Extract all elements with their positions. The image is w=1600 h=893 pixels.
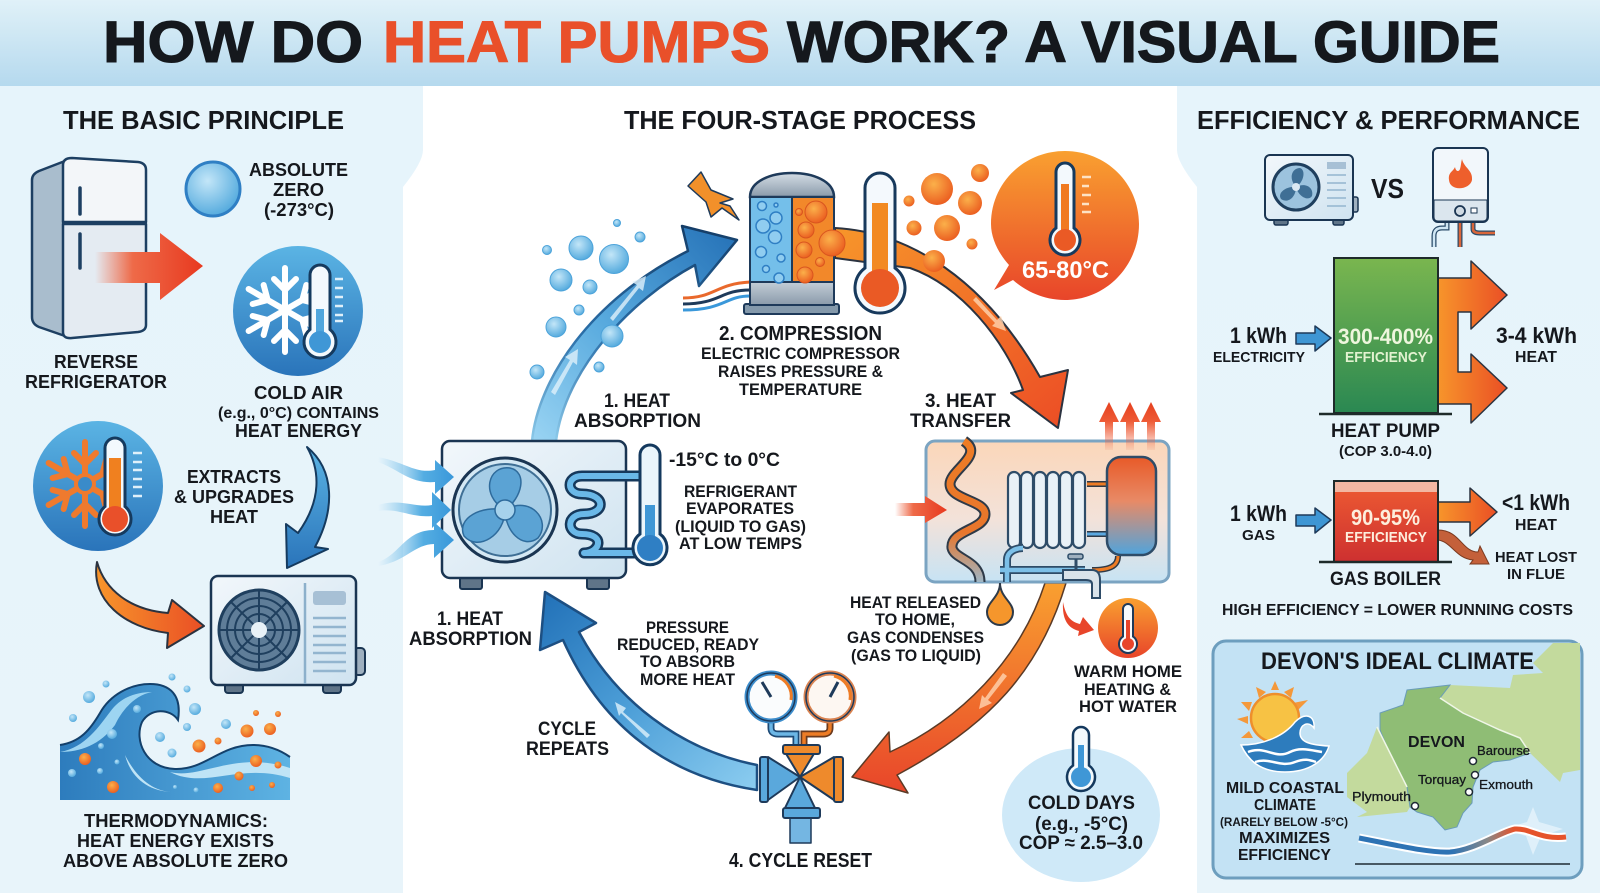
small flow arrows on arcs xyxy=(551,276,1007,738)
bar: heat pump efficiency: EFFICIENCY xyxy=(1345,349,1427,366)
icon: refrigerator xyxy=(32,158,146,338)
text: mild coastal climate: CLIMATE xyxy=(1254,797,1316,814)
text: 1 kWh gas xyxy=(1230,501,1287,544)
text: cold air contains heat energy: COLD AIR xyxy=(254,383,343,403)
text: heat released: GAS CONDENSES xyxy=(847,628,984,647)
arrows: rising heat xyxy=(1099,402,1161,450)
text: 1 kWh electricity xyxy=(1213,323,1305,366)
arrow: to warm home xyxy=(1063,602,1094,636)
text: heat released: HEAT RELEASED xyxy=(850,593,981,612)
text: 1. heat absorption upper: ABSORPTION xyxy=(574,411,701,432)
text: mild coastal climate: MILD COASTAL xyxy=(1226,780,1344,797)
icon: hot thermometer xyxy=(855,173,905,313)
callout: cold days xyxy=(1002,727,1160,882)
text: pressure reduced: TO ABSORB xyxy=(640,652,735,671)
icon: warm home circle xyxy=(1098,598,1158,658)
arrow: orange hot gas to heat transfer xyxy=(835,228,1068,428)
text: cold air contains heat energy xyxy=(218,383,379,441)
arrow: gas in xyxy=(1296,508,1331,533)
text: cold air contains heat energy: HEAT ENERGY xyxy=(235,421,362,441)
text: 1. heat absorption lower: 1. HEAT xyxy=(437,609,503,630)
text: mild coastal climate xyxy=(1220,780,1348,864)
text: extracts and upgrades heat xyxy=(174,467,294,527)
text: extracts and upgrades heat: EXTRACTS xyxy=(187,467,281,487)
arrow: electricity in xyxy=(1296,326,1331,351)
arrow: blue return to outdoor unit xyxy=(540,592,757,790)
text: 1. heat absorption upper: 1. HEAT xyxy=(604,391,670,412)
callout: high temperature 65-80°C xyxy=(991,151,1139,300)
text: map labels: Torquay xyxy=(1418,772,1467,787)
text: refrigerant evaporates: (LIQUID TO GAS) xyxy=(675,517,806,536)
icon: small heat pump xyxy=(1265,155,1358,225)
bar: gas boiler efficiency: 90-95% xyxy=(1351,505,1420,530)
text: 1. heat absorption lower xyxy=(409,609,532,650)
arrow: orange curved to unit xyxy=(96,562,204,648)
callout: cold days: (e.g., -5°C) xyxy=(1035,814,1128,835)
text: reverse refrigerator: REVERSE xyxy=(54,352,138,372)
text: warm home xyxy=(1074,662,1182,716)
icon: absolute zero ball xyxy=(186,162,240,216)
text: absolute zero: ABSOLUTE xyxy=(249,160,348,180)
icon: condensate drop xyxy=(987,583,1013,625)
text: cycle repeats: REPEATS xyxy=(526,739,609,760)
text: high efficiency lower running costs: HIGH EFFICIENCY = LOWER RUNNING COSTS xyxy=(1222,602,1573,619)
text: thermodynamics: HEAT ENERGY EXISTS xyxy=(77,831,274,851)
text: reverse refrigerator xyxy=(25,352,167,392)
text: refrigerant evaporates xyxy=(675,482,806,553)
text: warm home: WARM HOME xyxy=(1074,662,1182,681)
arrow: boiler heat output xyxy=(1438,488,1497,536)
text: map labels: DEVON xyxy=(1408,734,1465,751)
icon: radiator and hot water box xyxy=(926,441,1169,598)
text: refrigerant evaporates: REFRIGERANT xyxy=(684,482,798,501)
icon: pressure gauges xyxy=(747,673,854,746)
text: warm home: HOT WATER xyxy=(1079,697,1177,716)
arrows: incoming air to unit xyxy=(378,457,454,566)
panel: centre white process area xyxy=(403,86,1197,893)
text: heat released: TO HOME, xyxy=(875,610,955,629)
text: 3. heat transfer: 3. HEAT xyxy=(925,391,996,412)
text: map labels: Exmouth xyxy=(1479,777,1533,792)
text: 3. heat transfer: TRANSFER xyxy=(910,411,1011,432)
text: warm home: HEATING & xyxy=(1084,680,1171,699)
bar: gas boiler efficiency: EFFICIENCY xyxy=(1345,529,1427,546)
bar: heat pump efficiency xyxy=(1319,258,1452,414)
map: south west england xyxy=(1347,643,1580,830)
text: mild coastal climate: MAXIMIZES xyxy=(1239,830,1330,847)
text: 3-4 kWh heat: HEAT xyxy=(1515,349,1557,366)
icon: warm extraction circle xyxy=(33,421,163,551)
arrow: heat lost in flue xyxy=(1438,530,1489,564)
text: 4. cycle reset: 4. CYCLE RESET xyxy=(729,850,872,872)
text: reverse refrigerator: REFRIGERATOR xyxy=(25,372,167,392)
text: 1 kWh electricity: 1 kWh xyxy=(1230,323,1287,348)
text: cycle repeats xyxy=(526,719,609,760)
text: refrigerant evaporates: EVAPORATES xyxy=(686,499,794,518)
text: mild coastal climate: (RARELY BELOW -5°C) xyxy=(1220,815,1348,829)
heading: the basic principle: THE BASIC PRINCIPLE xyxy=(63,105,344,135)
title xyxy=(103,10,1500,75)
arrow: orange liquid to valve xyxy=(852,583,1066,793)
text: heat lost in flue: IN FLUE xyxy=(1507,566,1565,583)
text: 2. compression xyxy=(701,323,900,399)
text: refrigerant evaporates: AT LOW TEMPS xyxy=(679,534,802,553)
text: 1. heat absorption upper xyxy=(574,391,701,432)
text: cold air contains heat energy: (e.g., 0°C) CONTAINS xyxy=(218,405,379,422)
text: heat pump cop xyxy=(1331,421,1440,460)
icon: compressor xyxy=(744,173,845,314)
text: 1. heat absorption lower: ABSORPTION xyxy=(409,629,532,650)
text: pressure reduced: MORE HEAT xyxy=(640,670,736,689)
icon: sun and wave xyxy=(1237,681,1329,772)
arrows: heat pump output xyxy=(1438,261,1507,423)
text: extracts and upgrades heat: HEAT xyxy=(210,507,258,527)
icon: compressor wires xyxy=(683,282,750,310)
text: map labels: Barourse xyxy=(1477,743,1530,758)
arrow: blue curved to unit xyxy=(286,447,329,568)
panel: the four-stage process xyxy=(378,105,1182,882)
icon: electric bolt xyxy=(688,172,739,220)
panel: the basic principle xyxy=(25,105,379,871)
text: map labels: Plymouth xyxy=(1352,789,1411,804)
text: extracts and upgrades heat: & UPGRADES xyxy=(174,487,294,507)
title banner background xyxy=(0,0,1600,86)
text: heat pump cop: HEAT PUMP xyxy=(1331,421,1440,442)
icon: outdoor heat pump unit xyxy=(211,576,365,693)
text: absolute zero: (-273°C) xyxy=(264,200,334,220)
text: 2. compression: TEMPERATURE xyxy=(739,380,862,399)
bar: gas boiler efficiency xyxy=(1319,481,1452,562)
text: heat lost in flue: HEAT LOST xyxy=(1495,549,1577,566)
heading: efficiency and performance: EFFICIENCY & PERFORMANCE xyxy=(1197,105,1580,135)
arrow: blue rising vapour to compressor xyxy=(532,226,737,441)
text: 3-4 kWh heat xyxy=(1496,323,1577,366)
hot gas bubbles xyxy=(904,164,989,272)
text: 2. compression: RAISES PRESSURE & xyxy=(718,362,883,381)
text: heat lost in flue xyxy=(1495,549,1577,583)
panel: efficiency and performance xyxy=(1197,105,1582,878)
text: under 1 kWh heat xyxy=(1502,490,1570,534)
heading: the four-stage process: THE FOUR-STAGE PROCESS xyxy=(624,105,976,135)
panel: devon's ideal climate xyxy=(1213,641,1582,878)
icon: gas boiler xyxy=(1433,148,1495,247)
text: under 1 kWh heat: <1 kWh xyxy=(1502,490,1570,515)
text: heat released xyxy=(847,593,984,665)
text: under 1 kWh heat: HEAT xyxy=(1515,517,1557,534)
icon: expansion valve xyxy=(760,745,843,843)
cold vapour bubbles xyxy=(530,220,645,379)
callout: high temperature 65-80°C: 65-80°C xyxy=(1022,257,1109,284)
text: temperature range: -15°C to 0°C xyxy=(669,450,780,471)
text: absolute zero xyxy=(249,160,348,220)
text: 2. compression: ELECTRIC COMPRESSOR xyxy=(701,344,900,363)
arrow: heat out of fridge xyxy=(95,233,203,300)
text: cycle repeats: CYCLE xyxy=(538,719,596,740)
text: vs: VS xyxy=(1371,173,1404,204)
text: 3-4 kWh heat: 3-4 kWh xyxy=(1496,323,1577,348)
text: pressure reduced: REDUCED, READY xyxy=(617,635,760,654)
arrow: heat into coil xyxy=(895,496,947,523)
heading: devon's ideal climate: DEVON'S IDEAL CLIMATE xyxy=(1261,648,1534,675)
text: map labels xyxy=(1352,734,1533,804)
icon: ocean wave with molecules xyxy=(60,674,290,800)
title: WORK? A VISUAL GUIDE xyxy=(787,10,1500,75)
icon: large outdoor unit with coil xyxy=(442,441,640,589)
text: mild coastal climate: EFFICIENCY xyxy=(1238,847,1331,864)
text: pressure reduced: PRESSURE xyxy=(646,618,729,637)
text: heat pump cop: (COP 3.0-4.0) xyxy=(1339,443,1432,460)
title: HOW DO xyxy=(103,10,363,75)
text: thermodynamics: THERMODYNAMICS: xyxy=(84,811,268,831)
text: 1 kWh electricity: ELECTRICITY xyxy=(1213,349,1305,366)
callout: cold days: COLD DAYS xyxy=(1028,793,1135,814)
text: 1 kWh gas: GAS xyxy=(1242,527,1275,544)
text: 2. compression: 2. COMPRESSION xyxy=(719,323,882,345)
text: absolute zero: ZERO xyxy=(273,180,324,200)
bar: heat pump efficiency: 300-400% xyxy=(1338,324,1433,349)
text: heat released: (GAS TO LIQUID) xyxy=(851,646,981,665)
text: 3. heat transfer xyxy=(910,391,1011,432)
chart: temperature line xyxy=(1355,807,1570,864)
text: thermodynamics xyxy=(63,811,288,871)
callout: cold days: COP ≈ 2.5–3.0 xyxy=(1019,833,1143,854)
text: gas boiler: GAS BOILER xyxy=(1330,569,1441,590)
icon: cold thermometer xyxy=(633,445,667,565)
title: HEAT PUMPS xyxy=(383,10,770,75)
text: thermodynamics: ABOVE ABSOLUTE ZERO xyxy=(63,851,288,871)
text: pressure reduced xyxy=(617,618,760,689)
icon: cold air circle xyxy=(233,246,363,376)
map location dots xyxy=(1412,758,1478,810)
text: 1 kWh gas: 1 kWh xyxy=(1230,501,1287,526)
